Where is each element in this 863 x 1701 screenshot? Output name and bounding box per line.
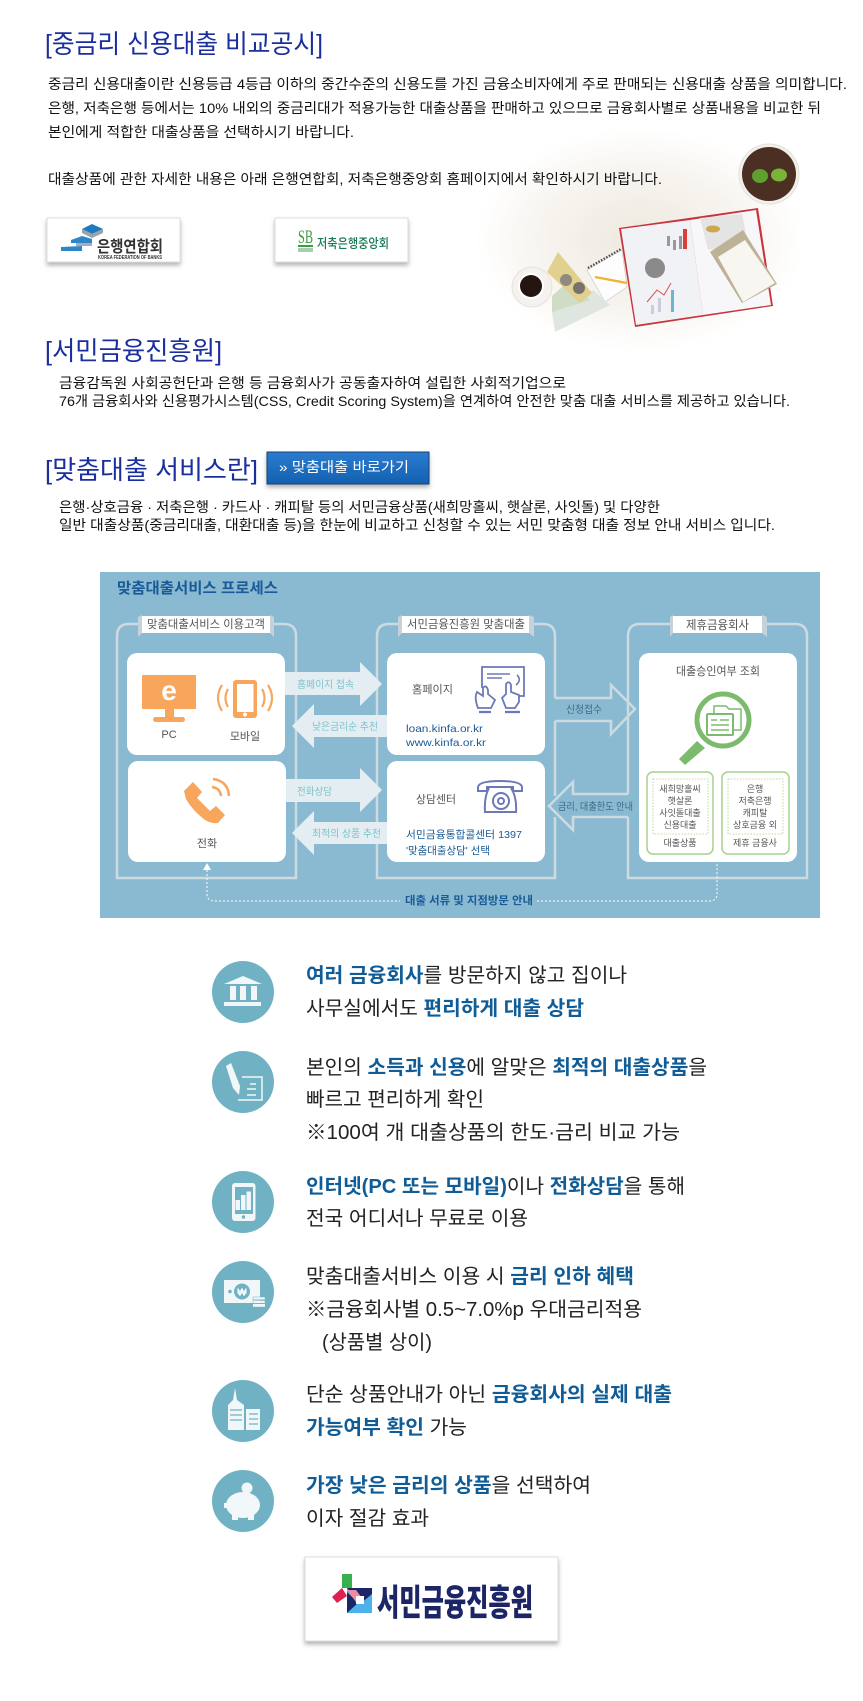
- icon: banknote and coins: [212, 1261, 274, 1323]
- text block: agency description: 금융감독원 사회공헌단과 은행 등 금융회사가 공동출자하여 설립한 사회적기업으로: [59, 375, 566, 391]
- frame: customers: [117, 624, 296, 878]
- logo: 서민금융진흥원: 서민금융진흥원: [377, 1582, 533, 1623]
- icon: piggy bank: [212, 1470, 274, 1532]
- icon: mobile: [218, 680, 272, 718]
- arrow: application: 신청접수: [566, 704, 602, 716]
- photo: desk with book, calculator and coffee: [475, 128, 805, 352]
- button: 맞춤대출 바로가기: [267, 452, 429, 484]
- card: consultation center: [387, 761, 545, 862]
- text block: intro paragraph: 중금리 신용대출이란 신용등급 4등급 이하의 중간수준의 신용도를 가진 금융소비자에게 주로 판매되는 신용대출 상품을 의미합니다.: [48, 76, 847, 92]
- benefit: convenient consultation: 여러 금융회사를 방문하지 않고 집이나: [306, 964, 627, 987]
- box: partner institutions: 캐피탈: [743, 808, 767, 818]
- box: partner institutions: 제휴 금융사: [733, 838, 778, 848]
- heading: 맞춤대출 서비스란: [맞춤대출 서비스란]: [45, 455, 258, 485]
- card: consultation center: 상담센터: [416, 793, 456, 806]
- benefit: interest savings: 가장 낮은 금리의 상품을 선택하여: [306, 1474, 591, 1497]
- heading: 서민금융진흥원: [서민금융진흥원]: [45, 336, 222, 366]
- logo: 은행연합회: KOREA FEDERATION OF BANKS: [98, 255, 163, 261]
- box: loan products: 새희망홀씨: [659, 783, 701, 794]
- benefit: interest discount: [212, 1261, 642, 1354]
- arrow: rate and limit guidance: 금리, 대출한도 안내: [558, 801, 633, 813]
- arrow: best product recommendation: [292, 811, 387, 855]
- arrow: application: [555, 685, 635, 734]
- arrow: phone consultation: [285, 768, 382, 812]
- icon: buildings: [212, 1380, 274, 1442]
- card: telephone: [128, 761, 286, 862]
- benefit: internet or phone: 인터넷(PC 또는 모바일)이나 전화상담을 통해: [306, 1175, 685, 1198]
- box: loan products: 신용대출: [663, 820, 697, 830]
- card: PC and mobile: 모바일: [230, 729, 260, 743]
- box: loan products: 사잇돌대출: [659, 807, 701, 818]
- button: 맞춤대출 바로가기: » 맞춤대출 바로가기: [279, 459, 409, 475]
- box: loan products: 햇살론: [668, 795, 692, 806]
- benefit: actual approval check: 가능여부 확인 가능: [306, 1416, 467, 1439]
- logo: 저축은행중앙회: [275, 218, 408, 262]
- logo: 은행연합회: 은행연합회: [97, 237, 163, 256]
- label: agency: [398, 615, 534, 637]
- label: partners: [670, 615, 767, 637]
- label: customers: 맞춤대출서비스 이용고객: [147, 618, 265, 631]
- chart: custom loan service process: 맞춤대출서비스 프로세스: [117, 580, 278, 597]
- arrow: dashed document guidance: 대출 서류 및 지점방문 안내: [405, 893, 533, 907]
- icon: pen and document: [212, 1051, 274, 1113]
- box: loan products: 대출상품: [663, 838, 697, 848]
- arrow: rate and limit guidance: [549, 782, 633, 830]
- text block: intro paragraph: 은행, 저축은행 등에서는 10% 내외의 중금리대가 적용가능한 대출상품을 판매하고 있으므로 금융회사별로 상품내용을 비교한 뒤: [48, 100, 821, 116]
- icon: magnifier: [679, 694, 749, 765]
- label: partners: 제휴금융회사: [686, 618, 749, 632]
- icon: calculator: [710, 230, 777, 303]
- label: agency: 서민금융진흥원 맞춤대출: [407, 617, 525, 631]
- card: homepage: 홈페이지: [412, 682, 453, 696]
- text block: service description: 일반 대출상품(중금리대출, 대환대출 등)을 한눈에 비교하고 신청할 수 있는 서민 맞춤형 대출 정보 안내 서비스 입니다.: [59, 517, 775, 533]
- text block: service description: 은행·상호금융 · 저축은행 · 카드사 · 캐피탈 등의 서민금융상품(새희망홀씨, 햇살론, 사잇돌) 및 다양한: [59, 499, 660, 515]
- box: partner institutions: 저축은행: [738, 795, 772, 806]
- box: partner institutions: [722, 772, 789, 854]
- box: partner institutions: 은행: [747, 783, 763, 794]
- icon: plant pot: [739, 144, 799, 204]
- text block: intro paragraph: [48, 76, 847, 187]
- icon: banknote and coins: ₩: [237, 1288, 247, 1298]
- box: partner institutions: 상호금융 외: [733, 819, 777, 830]
- label: customers: [138, 615, 274, 637]
- logo: 저축은행중앙회: 저축은행중앙회: [317, 236, 389, 251]
- card: consultation center: 서민금융통합콜센터 1397: [406, 829, 522, 841]
- icon: rotary phone: [478, 781, 522, 812]
- card: homepage: loan.kinfa.or.kr: [406, 723, 484, 735]
- card: consultation center: '맞춤대출상담' 선택: [406, 845, 490, 857]
- arrow: homepage access: [285, 662, 382, 706]
- icon: handset: [184, 779, 229, 823]
- logo: 은행연합회: [47, 218, 180, 262]
- benefit: interest savings: 이자 절감 효과: [306, 1507, 429, 1530]
- box: loan products: [647, 772, 713, 854]
- arrow: homepage access: 홈페이지 접속: [297, 678, 354, 691]
- benefit: convenient consultation: [212, 961, 627, 1023]
- arrow: low rate recommendation: [292, 704, 387, 748]
- icon: smartphone chart: [212, 1171, 274, 1233]
- benefit: best product: 본인의 소득과 신용에 알맞은 최적의 대출상품을: [306, 1056, 707, 1079]
- card: loan approval lookup: [639, 653, 797, 862]
- text block: agency description: 76개 금융회사와 신용평가시스템(CSS, Credit Scoring System)을 연계하여 안전한 맞춤 대출 서비스를 제공하고 있습니다.: [59, 393, 790, 409]
- card: telephone: 전화: [197, 837, 217, 850]
- heading: mid-rate loan comparison: [중금리 신용대출 비교공시]: [45, 29, 323, 59]
- benefit: best product: [212, 1051, 707, 1144]
- icon: tablet with hands: [476, 667, 524, 712]
- logo: 서민금융진흥원: [305, 1557, 558, 1641]
- text block: agency description: [59, 375, 790, 409]
- logo: 저축은행중앙회: SB: [298, 227, 313, 248]
- card: homepage: [387, 653, 545, 755]
- card: PC and mobile: PC: [161, 729, 177, 741]
- benefit: interest discount: 맞춤대출서비스 이용 시 금리 인하 혜택: [306, 1265, 634, 1288]
- card: loan approval lookup: 대출승인여부 조회: [676, 665, 760, 678]
- benefit: convenient consultation: 사무실에서도 편리하게 대출 상담: [306, 997, 584, 1020]
- benefit: internet or phone: 전국 어디서나 무료로 이용: [306, 1207, 528, 1230]
- arrow: best product recommendation: 최적의 상품 추천: [312, 828, 381, 840]
- arrow: dashed document guidance: [203, 862, 717, 907]
- text block: intro paragraph: 대출상품에 관한 자세한 내용은 아래 은행연합회, 저축은행중앙회 홈페이지에서 확인하시기 바랍니다.: [48, 171, 662, 187]
- benefit: best product: ※100여 개 대출상품의 한도·금리 비교 가능: [306, 1121, 680, 1144]
- arrow: low rate recommendation: 낮은금리순 추천: [312, 721, 378, 733]
- arrow: phone consultation: 전화상담: [297, 786, 332, 798]
- text block: service description: [59, 499, 775, 533]
- text block: intro paragraph: 본인에게 적합한 대출상품을 선택하시기 바랍니다.: [48, 124, 354, 140]
- icon: coffee cup: [512, 267, 552, 307]
- frame: agency: [377, 624, 555, 878]
- benefit: actual approval check: 단순 상품안내가 아닌 금융회사의 실제 대출: [306, 1383, 672, 1406]
- icon: notebook and pencil: [587, 249, 627, 302]
- icon: PC: [142, 675, 196, 722]
- icon: bank: [212, 961, 274, 1023]
- benefit: interest discount: (상품별 상이): [322, 1331, 432, 1354]
- chart: custom loan service process: [100, 572, 820, 918]
- benefit: best product: 빠르고 편리하게 확인: [306, 1088, 484, 1111]
- icon: banknotes and coins: [547, 252, 610, 332]
- icon: open book: [619, 208, 773, 327]
- benefit: internet or phone: [212, 1171, 685, 1233]
- icon: PC: e: [161, 675, 177, 706]
- benefit: interest discount: ※금융회사별 0.5~7.0%p 우대금리적용: [306, 1298, 642, 1321]
- benefit: actual approval check: [212, 1380, 672, 1442]
- card: homepage: www.kinfa.or.kr: [405, 737, 487, 749]
- frame: partners: [628, 624, 807, 878]
- benefit: interest savings: [212, 1470, 591, 1532]
- card: PC and mobile: [127, 653, 285, 755]
